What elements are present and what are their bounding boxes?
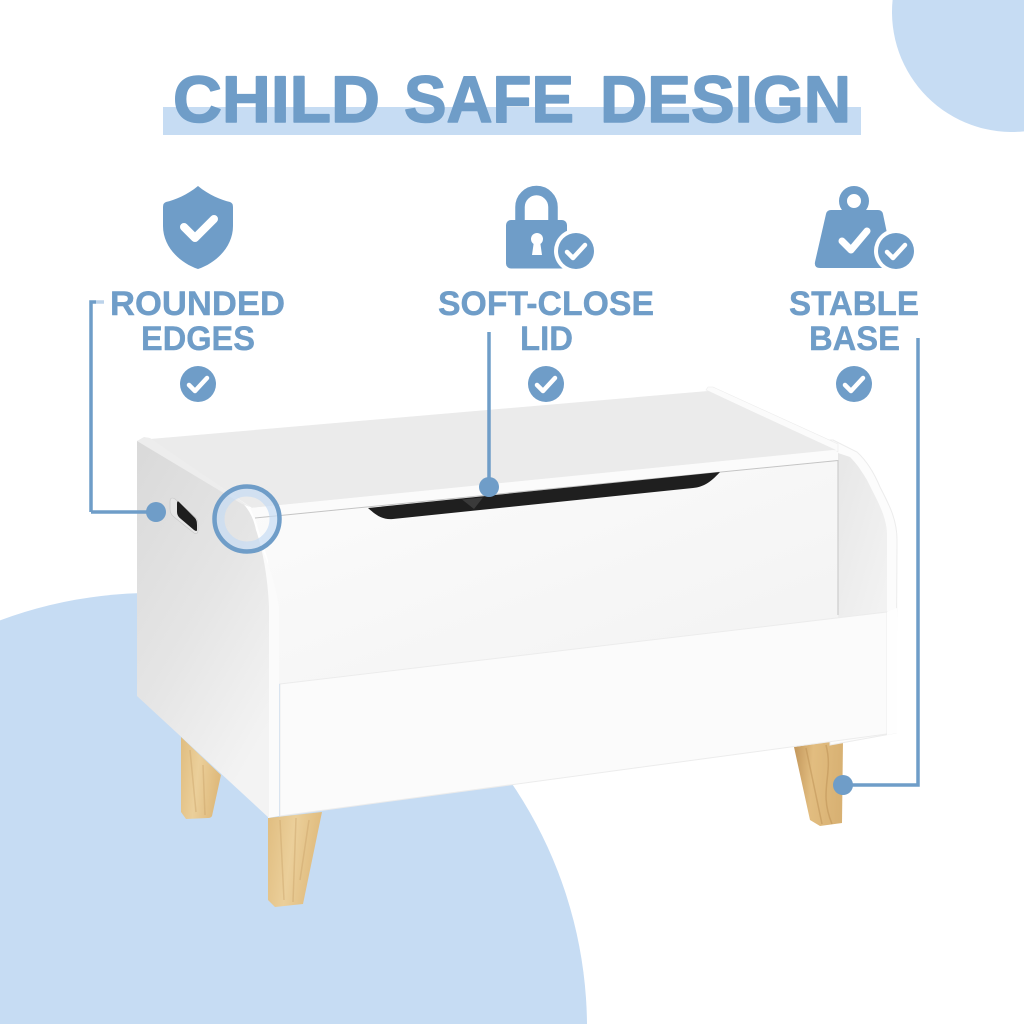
lid opening bbox=[368, 472, 720, 519]
title: CHILD bbox=[173, 62, 380, 136]
front left strip bbox=[247, 518, 279, 818]
front drawer panel bbox=[255, 461, 838, 684]
left side panel bbox=[137, 438, 269, 818]
background circle: bottom left bbox=[0, 593, 587, 1024]
lid seam shadow bbox=[255, 460, 838, 518]
side handle cutout bbox=[170, 498, 198, 534]
callout ring: rounded corner bbox=[214, 486, 280, 552]
toy chest product illustration bbox=[137, 387, 897, 907]
right leg bbox=[794, 740, 843, 826]
icon: weight with check bbox=[815, 190, 918, 273]
label: stable base: BASE bbox=[809, 320, 900, 358]
right front strip bbox=[887, 608, 897, 735]
title: DESIGN bbox=[600, 62, 851, 136]
label: stable base: STABLE bbox=[789, 285, 919, 323]
back left leg bbox=[181, 737, 221, 819]
inner right wall bbox=[838, 453, 887, 620]
check badge: stable base bbox=[836, 366, 872, 402]
label: soft-close lid: LID bbox=[520, 320, 573, 358]
front left leg bbox=[268, 812, 322, 907]
check badge: soft-close lid bbox=[528, 366, 564, 402]
lower front panel bbox=[280, 612, 887, 816]
lid top surface bbox=[150, 391, 836, 508]
check badge: rounded edges bbox=[180, 366, 216, 402]
label: rounded edges bbox=[110, 285, 285, 358]
drawer right seam bbox=[837, 460, 839, 615]
label: rounded edges: ROUNDED bbox=[110, 285, 285, 323]
label: soft-close lid bbox=[438, 285, 654, 358]
left top rail bbox=[137, 437, 250, 507]
background circle: top right bbox=[892, 0, 1024, 132]
leader line: soft-close lid bbox=[479, 332, 499, 497]
leader line: rounded edges bbox=[91, 302, 166, 522]
label: rounded edges: EDGES bbox=[141, 320, 255, 358]
lid right rail bbox=[706, 387, 838, 452]
leader line: stable base bbox=[833, 338, 918, 795]
label: stable base bbox=[789, 285, 919, 358]
icon: padlock with check bbox=[506, 190, 598, 273]
lid front edge bbox=[250, 450, 838, 519]
icon: shield with check bbox=[163, 186, 233, 269]
title: SAFE bbox=[404, 62, 574, 136]
right side panel bbox=[830, 440, 897, 745]
title bbox=[163, 62, 861, 136]
label: soft-close lid: SOFT-CLOSE bbox=[438, 285, 654, 323]
